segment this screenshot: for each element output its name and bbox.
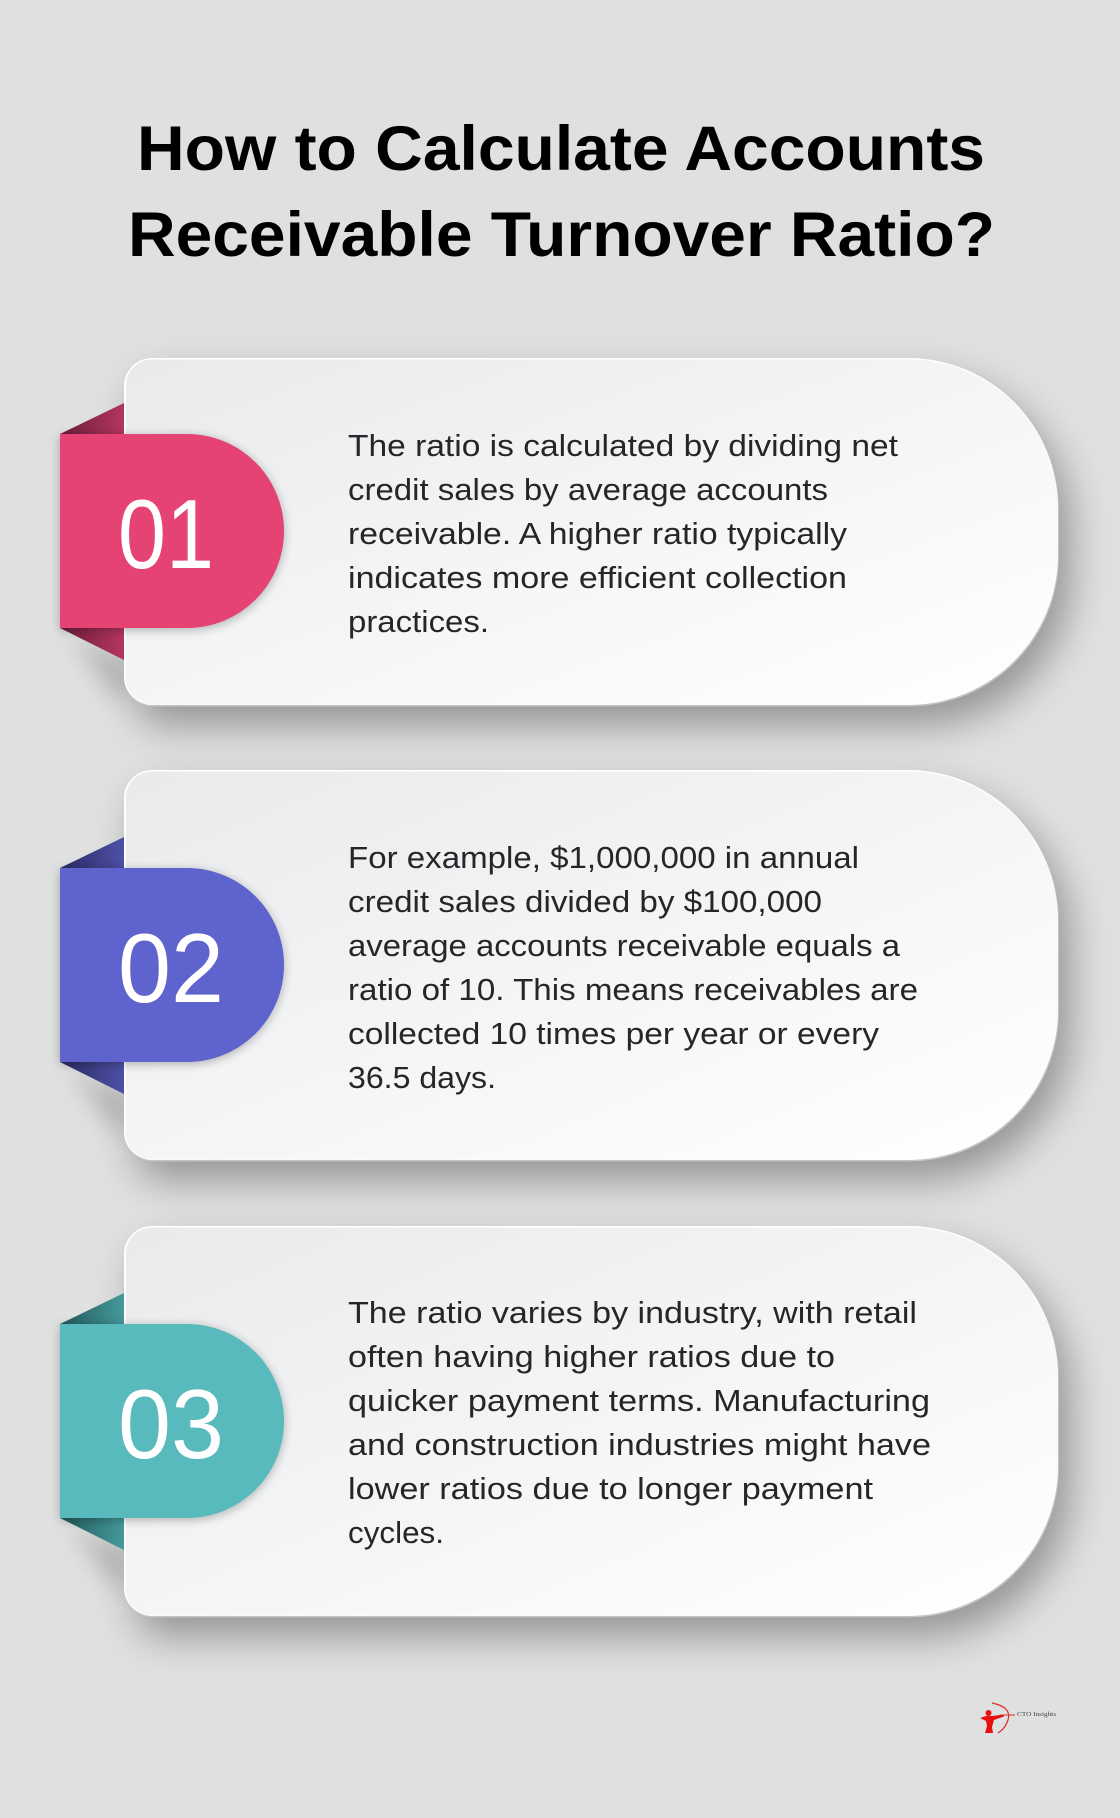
badge: 03: 03 — [118, 1369, 224, 1479]
text block: step 3: quicker payment terms. Manufacturing — [348, 1383, 930, 1418]
title: Receivable Turnover Ratio? — [128, 200, 995, 270]
title — [128, 114, 995, 270]
text block: step 2: credit sales divided by $100,000 — [348, 884, 822, 919]
icon: ribbon fold bottom — [60, 1518, 124, 1550]
icon: ribbon fold top — [60, 1293, 124, 1324]
panel: step 1 — [60, 358, 1070, 725]
badge: 01: 01 — [118, 479, 214, 589]
text block: step 3 — [348, 1295, 931, 1550]
icon: ribbon fold bottom — [60, 1062, 124, 1094]
text block: step 1: receivable. A higher ratio typically — [348, 516, 848, 551]
icon: ribbon fold top — [60, 403, 124, 434]
text block: step 2: average accounts receivable equals a — [348, 928, 901, 963]
text block: step 2: collected 10 times per year or every — [348, 1016, 880, 1051]
text block: step 2 — [348, 840, 918, 1095]
text block: step 2: For example, $1,000,000 in annual — [348, 840, 859, 875]
logo: archer — [980, 1703, 1057, 1733]
text block: step 2: ratio of 10. This means receivables are — [348, 972, 918, 1007]
panel: step 2 — [60, 770, 1070, 1180]
text block: step 3: The ratio varies by industry, with retail — [348, 1295, 917, 1330]
text block: step 1: credit sales by average accounts — [348, 472, 828, 507]
badge: 02: 02 — [118, 913, 224, 1023]
text block: step 3: and construction industries might have — [348, 1427, 931, 1462]
text block: step 3: cycles. — [348, 1515, 444, 1550]
logo: archer: CTO Insights — [1017, 1711, 1057, 1718]
text block: step 2: 36.5 days. — [348, 1060, 496, 1095]
text block: step 1: indicates more efficient collection — [348, 560, 847, 595]
text block: step 3: lower ratios due to longer payment — [348, 1471, 873, 1506]
text block: step 1: The ratio is calculated by dividing net — [348, 428, 898, 463]
icon: ribbon fold top — [60, 837, 124, 868]
badge: 02 — [60, 868, 284, 1062]
text block: step 1: practices. — [348, 604, 489, 639]
icon: archer figure — [980, 1703, 1015, 1733]
title: How to Calculate Accounts — [137, 114, 985, 184]
text block: step 1 — [348, 428, 898, 639]
icon: ribbon fold bottom — [60, 628, 124, 660]
panel: step 3 — [60, 1226, 1070, 1636]
badge: 03 — [60, 1324, 284, 1518]
text block: step 3: often having higher ratios due to — [348, 1339, 835, 1374]
badge: 01 — [60, 434, 284, 628]
